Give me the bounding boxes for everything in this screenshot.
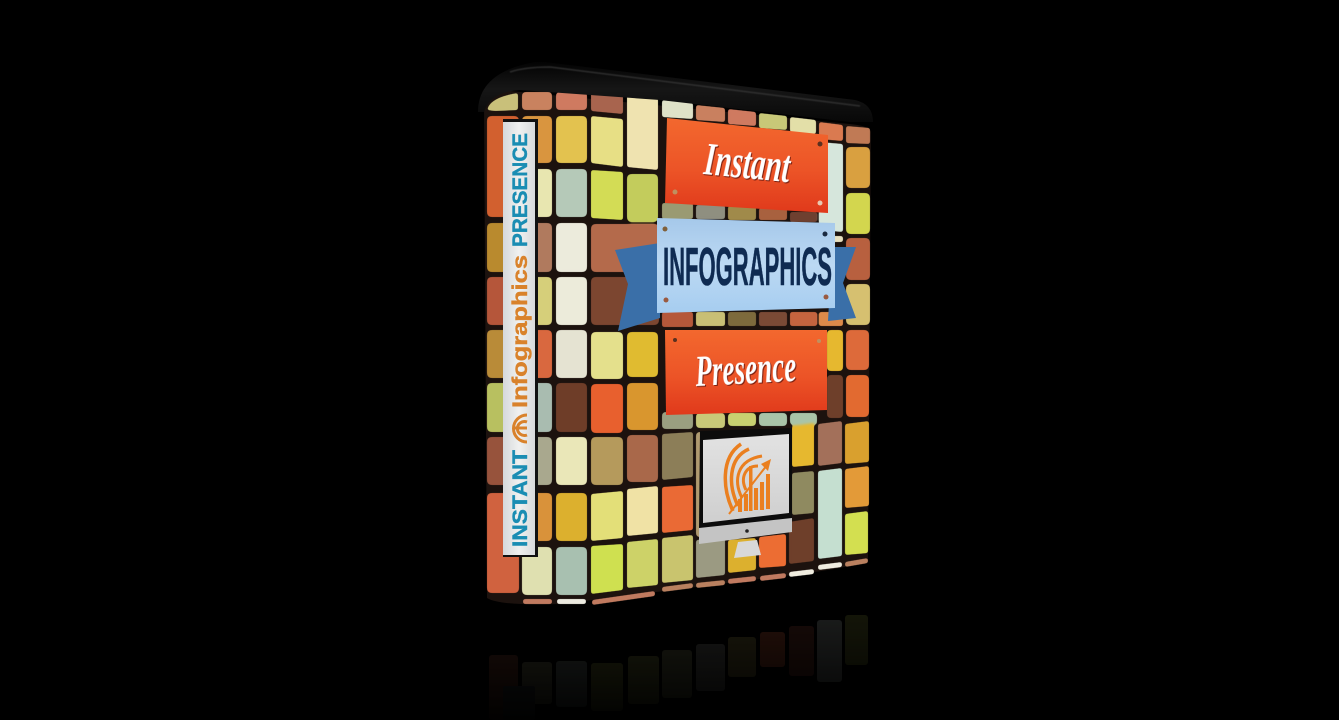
monitor screen: [703, 434, 789, 523]
column 4 tiles: [627, 95, 658, 588]
spine text: PRESENCE: PRESENCE: [509, 133, 532, 247]
column 1 tiles: [522, 92, 552, 604]
spine text: Infographics: Infographics: [509, 255, 532, 408]
column 2 tiles: [556, 92, 587, 604]
spine icon: logo: [514, 415, 527, 442]
column 6 tiles: [696, 105, 725, 588]
box: body and tile grid: [484, 91, 871, 605]
column 5 tiles: [662, 100, 693, 592]
reflection of box on floor: [480, 610, 880, 720]
sign: INFOGRAPHICS: [657, 218, 835, 313]
spine label: [503, 119, 538, 557]
column 10 tiles: [818, 122, 843, 570]
ribbon tails: [615, 243, 856, 331]
column 7 tiles: [728, 109, 756, 584]
spine side tiles: [487, 93, 519, 593]
column 3 tiles: [591, 92, 659, 605]
sign: Presence: [665, 330, 827, 415]
column 11 tiles: [845, 126, 870, 567]
icon: chart logo: [725, 444, 771, 514]
sign: Instant: [665, 118, 828, 213]
box lid: [478, 62, 873, 122]
sign text: Instant: Instant: [701, 133, 794, 193]
box body: [484, 91, 871, 604]
column 8 tiles: [759, 113, 787, 581]
spine text: INSTANT: INSTANT: [509, 450, 532, 547]
sign text: Presence: Presence: [693, 342, 797, 396]
column 9 tiles: [789, 117, 817, 577]
monitor: [699, 428, 792, 558]
text: INFOGRAPHICS: [663, 237, 832, 297]
all tiles: [487, 92, 870, 605]
